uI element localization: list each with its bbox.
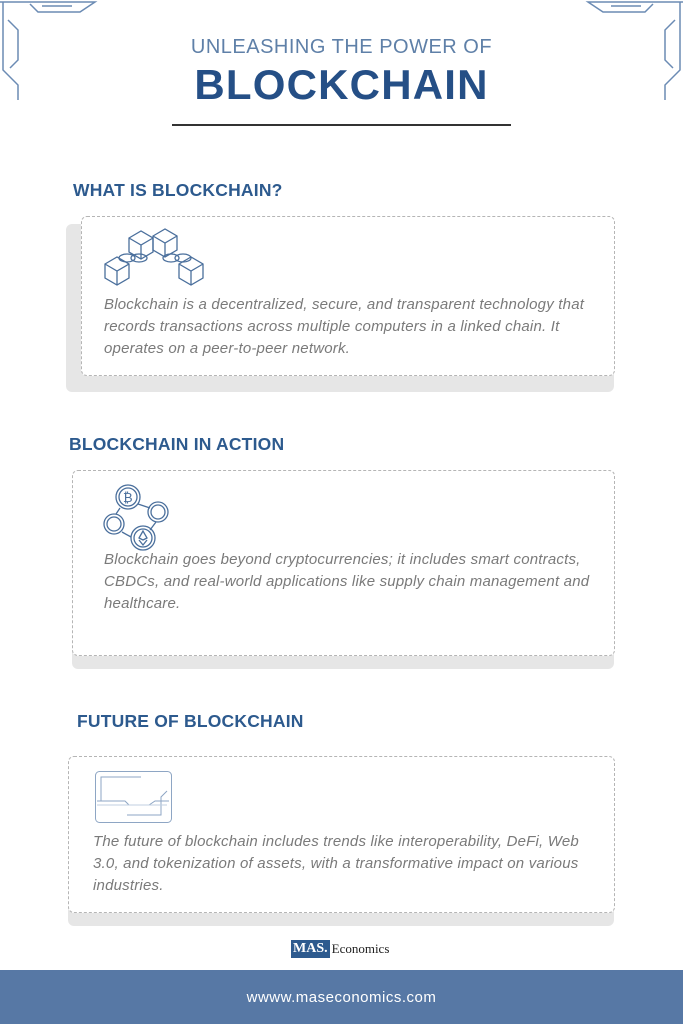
text block: operates on a peer-to-peer network. xyxy=(104,340,350,357)
text block xyxy=(104,296,584,357)
heading: blockchain in action: BLOCKCHAIN IN ACTION xyxy=(69,434,284,454)
logo: MAS. xyxy=(293,941,328,956)
text block: CBDCs, and real-world applications like supply chain management and xyxy=(104,573,589,590)
text block: The future of blockchain includes trends like interoperability, DeFi, Web xyxy=(93,833,579,850)
logo: Economics xyxy=(332,941,389,956)
heading: future of blockchain: FUTURE OF BLOCKCHAIN xyxy=(77,711,304,731)
footer xyxy=(0,970,683,1024)
panel: future of blockchain xyxy=(68,756,615,926)
icon: circuit card xyxy=(95,771,172,823)
heading: what is blockchain: WHAT IS BLOCKCHAIN? xyxy=(73,180,283,200)
icon: chain of blocks xyxy=(104,228,204,286)
text block: healthcare. xyxy=(104,595,180,612)
text block: Blockchain is a decentralized, secure, and transparent technology that xyxy=(104,296,584,313)
corner decoration left xyxy=(0,1,98,100)
text block: Blockchain goes beyond cryptocurrencies; it includes smart contracts, xyxy=(104,551,581,568)
text block: 3.0, and tokenization of assets, with a transformative impact on various xyxy=(93,855,578,872)
text block xyxy=(93,833,579,894)
footer: wwww.maseconomics.com xyxy=(247,989,436,1006)
panel: what is blockchain xyxy=(66,216,615,392)
corner decoration right xyxy=(586,1,683,100)
icon: crypto coins xyxy=(103,484,169,551)
panel: blockchain in action xyxy=(72,470,615,669)
logo xyxy=(291,940,389,958)
title: BLOCKCHAIN xyxy=(194,61,489,108)
text block: industries. xyxy=(93,877,164,894)
text block: records transactions across multiple computers in a linked chain. It xyxy=(104,318,559,335)
title: UNLEASHING THE POWER OF xyxy=(191,36,492,58)
icon: crypto coins: ₿ xyxy=(123,490,133,505)
title xyxy=(191,36,492,108)
text block xyxy=(104,551,590,612)
